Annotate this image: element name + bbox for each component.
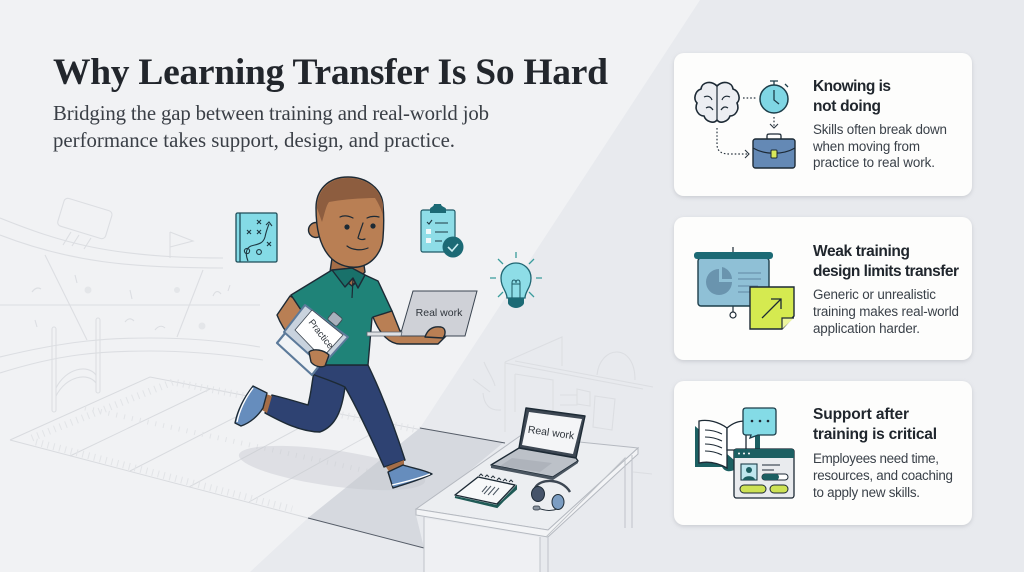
background: football field — [10, 377, 460, 518]
background: right diagonal panel — [250, 0, 1024, 572]
desk — [416, 436, 638, 572]
text: support after training: training is critical — [813, 426, 937, 443]
text: knowing is not doing: when moving from — [812, 139, 920, 154]
desk laptop: Real work — [527, 424, 576, 442]
back leg — [265, 368, 345, 432]
torso polo shirt — [291, 270, 392, 365]
text: support after training — [813, 406, 953, 500]
text: support after training: Support after — [813, 406, 909, 423]
text: weak training design: design limits transfer — [813, 263, 959, 280]
right arm — [373, 311, 447, 344]
subtitle: performance takes support, design, and practice. — [53, 129, 455, 152]
icon: playbook — [236, 213, 277, 262]
title: Why Learning Transfer Is So Hard — [53, 52, 608, 93]
person running — [235, 177, 477, 499]
background: floor shadow — [308, 428, 505, 548]
text: weak training design: application harder. — [813, 321, 920, 336]
front leg — [312, 365, 405, 467]
background: stadium sketch — [0, 197, 263, 412]
laptop held: Real work — [416, 307, 463, 319]
clipboard practice: Practice — [306, 317, 336, 351]
text: support after training: to apply new skills. — [813, 485, 920, 500]
collar — [332, 268, 365, 288]
text: knowing is not doing: Knowing is — [813, 78, 891, 95]
left arm — [277, 296, 328, 362]
front shoe — [386, 460, 404, 473]
ground shadow — [236, 437, 428, 499]
text: knowing is not doing — [812, 78, 947, 170]
text: weak training design: training makes real-world — [813, 304, 959, 319]
icon: presentation screen and sticky note — [694, 247, 794, 329]
text: weak training design: Generic or unrealistic — [813, 287, 936, 302]
text: knowing is not doing: Skills often break down — [813, 122, 947, 137]
panel: weak training design — [674, 217, 972, 360]
clipboard practice — [277, 305, 348, 375]
icon: light bulb — [490, 252, 542, 308]
desk laptop — [491, 408, 585, 480]
text: knowing is not doing: not doing — [813, 98, 881, 115]
panel: knowing is not doing — [674, 53, 972, 196]
laptop held — [367, 291, 477, 338]
back shoe — [262, 394, 272, 413]
text: weak training design — [813, 243, 959, 336]
icon: book, chat bubble and app window — [695, 408, 794, 498]
subtitle: Bridging the gap between training and real-world job — [53, 102, 489, 125]
hand on clipboard — [309, 350, 329, 367]
head and neck — [308, 177, 384, 288]
text: weak training design: Weak training — [813, 243, 910, 260]
headset — [532, 481, 570, 511]
notebook — [455, 474, 516, 507]
icon: brain, clock and briefcase — [695, 81, 795, 168]
text: support after training: resources, and coaching — [813, 468, 953, 483]
background: office sketch — [473, 337, 653, 474]
icon: checklist clipboard — [421, 204, 464, 258]
text: knowing is not doing: practice to real work. — [813, 155, 935, 170]
panel: support after training — [674, 381, 972, 525]
text: support after training: Employees need time, — [813, 451, 939, 466]
subtitle — [53, 102, 489, 152]
